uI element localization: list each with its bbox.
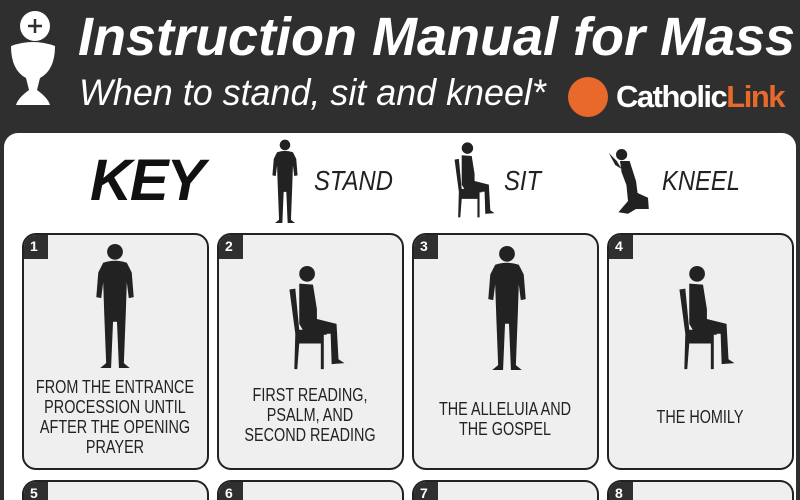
card 1 xyxy=(22,233,209,470)
key: kneel xyxy=(608,149,740,214)
key: stand xyxy=(272,140,393,223)
card 3: 3 xyxy=(420,238,428,254)
key: kneel: KNEEL xyxy=(662,165,740,196)
panel: main xyxy=(4,133,796,500)
card 3 xyxy=(412,233,599,470)
card 3: THE ALLELUIA AND xyxy=(439,399,571,419)
card 2: 2 xyxy=(225,238,233,254)
card 8 xyxy=(607,480,794,500)
logo: CatholicLink: CatholicLink xyxy=(616,79,784,114)
key: stand: STAND xyxy=(314,165,393,196)
card 2: FIRST READING, xyxy=(253,385,367,405)
header: icon chalice xyxy=(11,11,55,105)
subtitle: When to stand, sit and kneel* xyxy=(79,72,546,113)
card 4: THE HOMILY xyxy=(657,407,743,427)
card 1: 1 xyxy=(30,238,38,254)
card 5 xyxy=(22,480,209,500)
card 2: SECOND READING xyxy=(244,425,376,445)
card 1: FROM THE ENTRANCE xyxy=(36,377,194,397)
title: Instruction Manual for Mass xyxy=(78,7,795,67)
card 2 xyxy=(217,233,404,470)
key: sit xyxy=(454,142,542,218)
card 2: PSALM, AND xyxy=(267,405,353,425)
card 1: AFTER THE OPENING xyxy=(40,417,190,437)
card 3: THE GOSPEL xyxy=(459,419,551,439)
key: sit: SIT xyxy=(504,165,541,196)
card 1: PROCESSION UNTIL xyxy=(44,397,186,417)
logo: CatholicLink xyxy=(568,77,786,117)
card 7 xyxy=(412,480,599,500)
key heading: KEY xyxy=(90,148,203,213)
card 6 xyxy=(217,480,404,500)
card 1: PRAYER xyxy=(86,437,144,457)
card 4 xyxy=(607,233,794,470)
card 4: 4 xyxy=(615,238,623,254)
